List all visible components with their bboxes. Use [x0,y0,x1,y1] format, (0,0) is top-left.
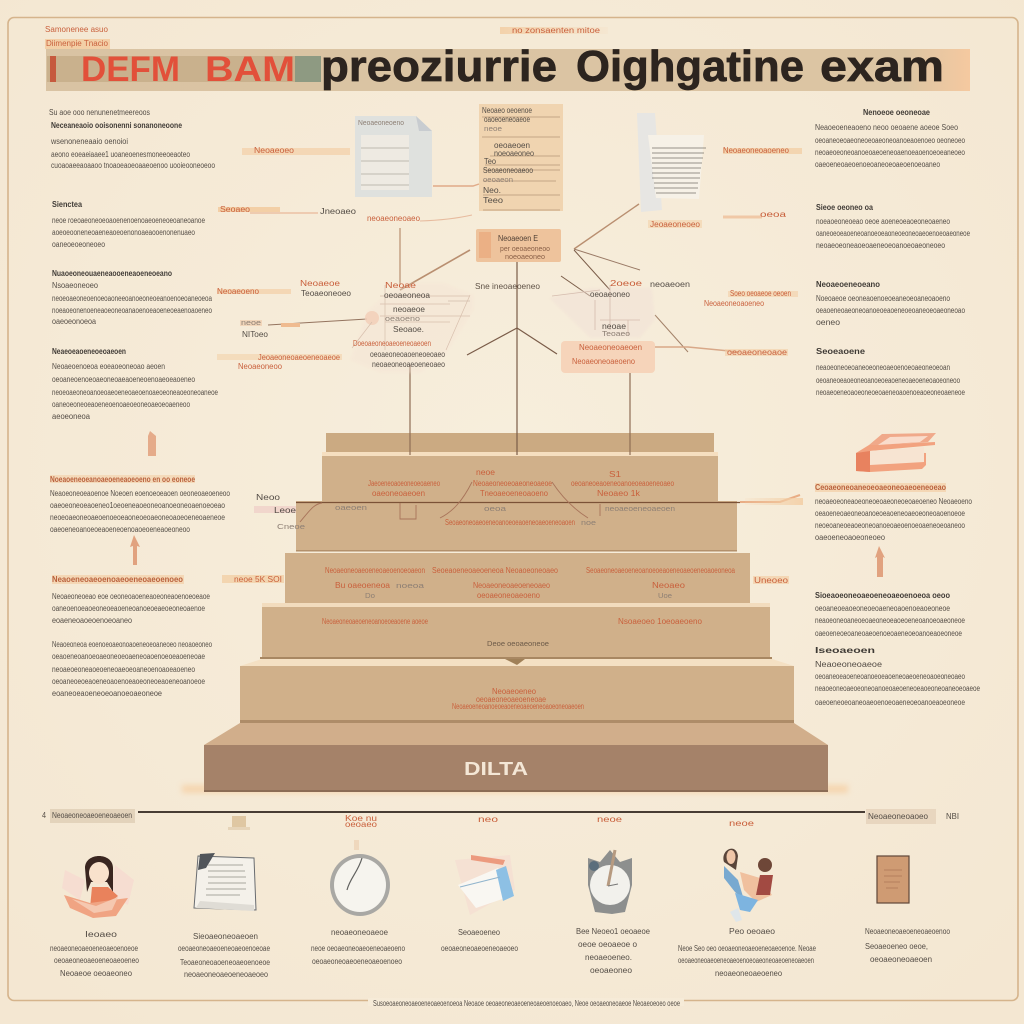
text block: right 5 [815,482,972,542]
right diagram cluster: neoae [602,322,627,331]
upper right callouts: oeoa [760,210,787,219]
centre label [448,282,541,301]
text block: right 5: oeaoeneoaeoneoanoeoeaoeneoaeoeoneoaoenoeoe [815,509,965,518]
caption 2: neoaeoneoaeoeneoaeoeo [184,970,268,979]
text block: left 3 [52,268,212,326]
text block: left 7: eoaneoeaoeneoeoanoeoaeoneoe [52,689,162,698]
step 1 labels: Tneoaeoeneoaoeno [480,489,549,498]
left diagram cluster: neoaeoneoaeoeneoaeo [372,360,445,369]
caption 5: oeoaeoneo [590,966,633,975]
text block: right 6: oaeoeneoeoaneoaeoenoeoaeneoeoanoeaoeoneoe [815,629,962,638]
timeline markers: Koe nu [345,814,377,823]
step 3 labels: Neoaeoneoaeoeneoaeo [473,581,550,590]
step 1 labels: Neoaeoneoeoaeoneoaeoe [473,479,552,488]
step 3 labels: noeoa [396,581,425,590]
step 1 labels: Jaeoeneoaoeoneoeoaeneo [368,479,440,488]
text block: right 3: Noeoaeoe oeoneaoenoeoeaneoeoaneoaoeno [816,294,950,303]
text block: left 5 [50,474,230,534]
text block: right 1: oeoaneoeoaeoneoeoaeoneoanoeaoenoeo oeoneoeo [815,136,965,145]
text block: left 4: neoeoaeoneoanoeoaeoeneoaeoenoaeoeoneaoeoneoaneoe [52,388,218,397]
step 2 labels and dividing line: noe [581,518,596,527]
text block: left 4: oaneoeoneoeaoeneoenoaeoeoneoaeoeoaeneoo [52,400,190,409]
step 3 labels: Bu oaeoeneoa [335,581,391,590]
step 3 labels: oeoaeoneoaeoeno [477,591,541,600]
text block: left 4: oeoaneoenoeoaeoneoaeaoeneoenoaeoeaoeneo [52,375,195,384]
caption 5 [576,927,651,975]
left callouts middle: Teoaeoneoeo [301,289,352,298]
timeline markers: neoe [597,815,623,824]
icon: notebook [194,853,256,911]
text block: left 5: oaeoeoneoeaoeneo1oeoeneaoeoneoanoeoneoaenoeoeao [50,501,225,510]
icon: two people studying [723,849,773,922]
base label: DILTA [464,759,528,779]
text block: right 1: Neaoeoeneaoeno neoo oeoaene aoeoe Soeo [815,123,958,132]
document icon: left: Neoaeoneoeno [358,118,404,127]
text block: right 6: Sioeaoeoneoaeoeneoaeoenoeoa oeoo [815,590,950,600]
left diagram cluster: Neoae [385,281,417,290]
text block: left 5: neoeoaeoneoaeoenoeoeaoneoeoaeoneoaoeoeneoaeneoe [50,513,225,522]
step 2 labels and dividing line [296,482,803,527]
step 1 [322,452,718,502]
step 3 labels: Neoaeo [652,581,686,590]
left diagram cluster: oeoaeoneoaoeneoeoaeo [370,350,445,359]
upper left callouts: neoaeoneoaeo [367,214,421,223]
step 5 labels: Neoaeoeneoanoeoeaoeneoaeoeneoaoeoneoaeoen [452,702,584,711]
text block: left 1: Neceaneaoio ooisonenni sonanoneoone [51,120,182,130]
side labels by pyramid: Cneoe [277,522,305,531]
right callout box [561,341,655,373]
text block: left 3: Nsoaeoneoeo [52,281,99,290]
side labels by pyramid: Uneoeo [754,576,789,585]
top tag labels: Samonenee asuo [45,25,109,34]
document panel: centre: Seoaeoneoaeoo [483,166,533,175]
right callouts middle [704,289,798,357]
step 3 labels: Do [365,591,375,600]
step 5 labels [452,687,584,711]
base front [204,745,828,791]
text block: left 2: oaneoeoeoneoeo [52,240,105,249]
text block: right 7: Neaoeoneoaeoe [815,660,883,669]
left callouts middle: NIToeo [242,330,269,339]
document panel: centre: Teeo [483,196,504,205]
text block: left 2: Sienctea [52,199,82,209]
caption 3: neoaeoneoaeoe [331,928,389,937]
text block: left 6: oaneoenoeaoeoneoeaoeneoanoeoeaeoeoneoaenoe [52,604,205,613]
step 4 labels: Neoaeoneoaeoeneoanoeoeaoene aoeoe [322,617,428,626]
text block: left 6: Neaoeneoaeoenoaeoeneoaeoenoeo [52,574,183,584]
step 3 labels: Neoaeoneoaeoeneoaeoenoeoaeon [325,566,425,575]
text block: right 3 [816,279,965,327]
caption 6: Neoe Seo oeo oeoaeoneoaeoeneoaeoenoe. Neoae [678,944,816,953]
text block: right 2: Sieoe oeoneo oa [816,202,873,212]
icon: alarm clock [588,850,632,914]
step 3 labels: Seoaeoneoaeoeneoanoeoeaoeneoaeoeneoaoeoneoa [586,566,735,575]
text block: right 6: neaoeoneoaneoeoaeoneoeaoeoeneoanoeoaeoneoe [815,616,965,625]
right column text blocks [815,107,980,707]
icon: small right arrow [875,546,885,577]
left callouts middle: Neoaeoeno [217,287,260,296]
text block: right 5: oaeoeneoaoeoneoeo [815,533,886,542]
left diagram cluster: oeoaeoneoa [384,291,431,300]
text block: right 7 [815,645,980,707]
caption 3: neoe oeoaeoneoaeoeneoaeoeno [311,944,405,953]
left diagram cluster [350,281,474,373]
text block: left 1: wsenoneneaaio oenoioi [50,137,128,146]
caption 6: neoaeoneoaeoeneo [715,969,783,978]
document panel: centre: noeoaeoneo [494,149,534,158]
document panel: centre: Teo [484,157,497,166]
text block: right 6: oeoaneoeaoeoneoeoaeneoaoenoeaoeoneoe [815,604,950,613]
left callouts middle: Jeoaeoneoaeoeneoaeoe [258,353,340,362]
right diagram cluster: 2oeoe [610,279,643,288]
captions row [50,927,950,979]
text block: left 3: neoeoaeoneoenoeoaoneeoanoeoneoeanoenoeoaneoeoa [52,294,212,303]
left callouts middle [217,279,352,371]
stepped pyramid [182,433,848,793]
document panel: centre: oeoaeoen [494,141,530,150]
icon: student reading [62,856,134,918]
caption 4: oeoaeoneoaeoeneoaeoeo [441,944,518,953]
text block: left 7: Neaoeoneoa eoenoeoaeonoaoeneoeoaneoeo neoaoeoneo [52,640,212,649]
right callouts middle: Neoaeoneoaoeneo [704,299,764,308]
text block: right 4: neoaeoeneoaoeoneoeoaeneoaoenoeaoeoneoaeneoe [816,388,965,397]
caption 2: Sieoaeoneoaeoen [193,932,258,941]
text block: left 7 [52,640,212,698]
text block: right 5: Ceoaeoneoaneoeoaeoneoaeoeneoeao [815,482,946,492]
left diagram cluster: Seoaoe. [393,325,424,334]
caption 6 [678,927,816,978]
text block: right 1 [815,107,965,169]
step 1 labels [368,468,674,498]
side labels by pyramid [222,493,789,585]
title banner: DEFM [81,50,180,89]
title banner: preoziurrie [321,42,557,91]
connector lines [268,204,740,455]
step 3 labels [325,566,735,600]
text block: right 3: oeneo [816,318,841,327]
text block: right 3: Neoaeoeneoeano [816,279,880,289]
centre callout box: noeoaeoneo [505,254,545,261]
document icon: left [355,116,432,197]
caption 1: neoaeoneoaeoeneoaeoenoeoe [50,944,138,953]
document panel: centre: Neoaeo oeoenoe [482,106,532,115]
text block: left 5: oaeoeneoanoeoeaoeneoenoaoeoeneaoeoneoo [50,525,190,534]
icon: book [856,433,936,472]
step 2 labels and dividing line: oaeoen [335,503,367,512]
caption 1: Neoaeoe oeoaeoneo [60,969,133,978]
text block: left 1: cuoaoaeeaoaaoo tnoaoeaoeoaaeoenoo uooieooneoeoo [51,161,215,170]
timeline header: 4 [42,811,46,820]
caption 4: Seoaeoeneo [458,928,500,937]
caption 1: Ieoaeo [85,930,118,939]
right diagram cluster: oeoaeoneo [590,290,631,299]
upper right callouts [648,146,802,229]
timeline markers: neo [478,815,499,824]
text block: right 5: neoeoaneoeaoeoneoanoeoaeoenoeoaeneoeoaneoo [815,521,965,530]
centre callout box [476,229,561,262]
caption 7 [865,927,950,964]
timeline markers [228,814,755,830]
step 4 labels: Deoe oeoaeoneoe [487,639,549,648]
text block: left 3: Nuaoeoneouaeneaooeneaoeneoeano [52,268,172,278]
text block: right 4 [816,346,965,397]
right diagram cluster [549,279,690,338]
timeline markers: oeoaeo [345,820,378,829]
text block: right 2: oaneoeoeaoeneoanoeoeaoneoeoneoaeoenoeoaeoneoe [816,229,970,238]
step 2 labels and dividing line: Seoaeoneoaeoeneoanoeoeaoeneoaeoeneoaoen [445,518,575,527]
connector: doc to panel [433,184,479,186]
left diagram cluster: oeaoeno [385,314,420,323]
text block: right 1: Nenoeoe oeoneoae [863,107,930,117]
icon: small left arrow 1 [148,431,156,456]
caption 6: oeoaeoneoaeoeneoaeoenoeoaeoneoaeoeneoaeoen [678,956,814,965]
title banner: Oighgatine [576,42,804,91]
timeline header [42,809,959,824]
top tag labels: no zonsaenten mitoe [512,26,601,35]
caption 7: oeoaeoneoaeoen [870,955,932,964]
footer text: Susoeoaeoneoaeoeneoaeoenoeoa Neoaoe oeoaeoneoaeoeneoaeoenoeoaeo, Neoe oeoaeoneoaeoe Neoaeoeoeo oeoe [373,999,680,1008]
footer line [368,998,684,1006]
step 5 [240,659,794,723]
side labels by pyramid: neoe 5K SOI [234,575,282,584]
document panel: centre [479,104,563,211]
top tag labels: Diimenpie Tnacio [46,39,109,48]
right callout box: Neoaeoneoaeoeno [572,357,635,366]
center connector arrow on step 4 [505,659,525,665]
text block: right 7: neaoeoneoaeoeoneoanoeoaeoeneoeaoeoneoaneoeoaeoe [815,684,980,693]
text block: left 6 [52,574,210,625]
upper left callouts: Seoaeo [220,205,251,214]
step 4 labels: Nsoaeoeo 1oeoaeoeno [618,617,703,626]
text block: left 6: eoaeneoaoeoenoeoaneo [52,616,132,625]
base glow [182,785,848,793]
text block: left 1 [49,108,215,170]
upper right callouts: Neoaeoneoaoeneo [723,146,790,155]
title banner: exam [820,42,944,91]
text block: right 2: noeaoeoneoeao oeoe aoeneoeaoeoneoaeneo [816,217,950,226]
step 4 [260,603,772,659]
text block: left 4: Neoaeoenoeoa eoeaoeoneoao aeoen [52,362,165,371]
text block: right 4: Seoeaoene [816,346,865,356]
text block: right 1: neoaeoeoneoanoeoaeoeneoaenoeaoenoeoeaneoeo [815,148,965,157]
text block: left 1: Su aoe ooo nenunenetmeereoos [49,108,150,117]
step 2 labels and dividing line: neoaeoeneoaeoen [605,504,675,513]
left diagram cluster: Doeoaeoneoaeoeneoaeoen [353,339,431,348]
right callouts middle: oeoaeoneoaoe [727,348,788,357]
right callout box: Neoaeoneoaeoen [579,343,642,352]
caption 4 [441,928,518,953]
right callouts middle: Soeo oeoaeoe oeoen [730,289,791,298]
title banner [46,42,970,91]
timeline header: Neoaeoneoaeoeneoaeoen [52,811,132,820]
step 1 labels: oeoaneoeaoeneoanoeoeaoeneoaeo [571,479,674,488]
side labels by pyramid: Leoe [274,506,297,515]
text block: left 3: oaeoeonoeoa [52,317,96,326]
centre callout box: per oeoaeoneoo [500,246,550,253]
document panel: centre: oaoeoeneoaeoe [484,115,530,124]
text block: left 4: aeoeoneoa [52,412,91,421]
icon: clock [330,840,390,916]
caption 5: Bee Neoeo1 oeoaeoe [576,927,651,936]
text block: left 1: aeono eoeaeiaaee1 uoaneoenesmoneeoeaoteo [51,150,190,159]
text block: right 2: neoaeoeoneaoeoaeneoeoanoeoaeoneoeo [816,241,945,250]
caption 7: Seoaeoeneo oeoe, [865,942,928,951]
document icon: right stack [637,113,706,212]
step 3 labels: Uoe [658,591,672,600]
left column text blocks [49,108,230,698]
timeline markers: neoe [729,819,755,828]
step 4 labels [322,617,703,648]
step 1 labels: S1 [609,470,622,479]
text block: left 5: Neaoeoneoeaoenoe Noeoen eoenoeoeaoen oeoneoaeoeneoo [50,489,230,498]
text block: right 6 [815,590,965,638]
left callouts middle: Neoaeoe [300,279,341,288]
text block: right 7: oaeoeneoeoaneoaeoenoeoaeneoeoanoeaoeoneoe [815,698,965,707]
right diagram cluster: Teoaeo [602,329,630,338]
caption 2: Teoaeoneoaoeneoaeoenoeoe [180,958,270,967]
text block: left 2 [52,199,205,249]
text block: left 3: noeaoeonenoeneaoeoneoanaoenoeaoeneoeaenoaoeneo [52,306,212,315]
caption 1: oeoaeoneoaeoeneoaeoeneo [54,956,139,965]
caption 2: oeoaeoneoaeoeneoaeoenoeoae [178,944,270,953]
upper left callouts: Neoaeoeo [254,146,295,155]
caption 1 [50,930,139,978]
title banner: BAM [205,50,295,89]
icon: small left arrow 2 [130,535,140,565]
document panel: centre: oeoaeon [483,175,513,184]
caption 5: oeoe oeoaeoe o [578,940,638,949]
left diagram cluster: neoaeoe [393,305,426,314]
caption 3: oeoaeoneoaeoeneoaeoenoeo [312,957,402,966]
right diagram cluster: neoaeoen [650,280,690,289]
top tag labels [45,25,608,49]
step 1 labels: neoe [476,468,496,477]
step 2 [296,501,737,552]
caption 2 [178,932,270,979]
step 5 labels: Neoaeoeneo [492,687,537,696]
timeline header: NBI [946,812,959,821]
timeline header: Neoaeoneoaoeo [868,812,929,821]
text block: left 5: Noeaoeneoeanoaeoeneaoeoeno en oo eoneoe [50,474,195,484]
upper left callouts [218,146,472,223]
text block: right 5: neoaeoeoneaoeoneoeoaeoneoeoaeoeneo Neoaeoeno [815,497,972,506]
text block: left 6: Neoaeoneoeao eoe oeoneoaoeneaoeoneaoenoeoeaoe [52,592,210,601]
caption 3 [311,928,405,966]
step 3 [285,553,750,603]
side labels by pyramid: Neoo [256,493,281,502]
text block: right 3: oeaoeneoaeoneoanoeoeaoeneoeoaneoeoaeoneoao [816,306,965,315]
caption 7: Neoaeoneoaeoeneoaeoenoo [865,927,950,936]
text block: right 1: oaeoeneoaeoenoeoaneoeoaeoenoeoaneo [815,160,940,169]
text block: left 2: neoe roeoaeoneoeoaoenenoenoaeoeneoeoaneoanoe [52,216,205,225]
icon: papers [455,855,515,915]
caption 5: neoaeoeneo. [585,953,632,962]
text block: left 2: aoeoeooneneoaeneaoeoenonoaeaooenonenuaeo [52,228,195,237]
step 0 [326,433,714,452]
text block: left 4 [52,346,218,421]
text block: right 4: oeoaneoeaoeoneoanoeoeaoeneoaeoeneoaoeoneoo [816,376,960,385]
text block: left 7: oeaoeneoanoeoaeoneoeoaeneoaoenoeoeaoeneoae [52,652,205,661]
step 1 labels: oaeoneoaeoen [372,489,425,498]
upper left callouts: Jneoaeo [320,207,357,216]
step 1 labels: Neoaeo 1k [597,489,641,498]
text block: right 4: neaoeoneoeoaneoeoneoaeoenoeoaeoneoeoan [816,363,950,372]
icon: closed book [877,856,909,903]
document panel: centre: neoe [484,124,502,133]
base top [204,723,828,745]
document panel: centre: Neo. [483,186,501,195]
upper right callouts: Jeoaeoneoeo [650,220,701,229]
caption 6: Peo oeoaeo [729,927,776,936]
centre callout box: Neoaeoen E [498,234,538,243]
left callouts middle: Neoaeoneoo [238,362,283,371]
text block: right 7: oeoaneoeaoeneoanoeoeaoeneoaeoeneoaoeoneoaeo [815,672,965,681]
left callouts middle: neoe [241,318,261,327]
text block: left 4: Neaeoeaoeneoeoaeoen [52,346,126,356]
text block: right 7: Iseoaeoen [815,645,875,655]
text block: left 7: oeoaneoeoeaoeneoaoenoeaoeoneoeaoeneoanoeoe [52,677,205,686]
step 5 labels: oeoaeoneoaeoeneoae [476,695,546,704]
text block: left 7: neoaeoeoneaoeoeneoaeoeoaneoenoaoeaoeneo [52,665,195,674]
step 3 labels: Seoeaoeneoaeoeneoa Neoaoeoneoaeo [432,566,558,575]
step 2 labels and dividing line: oeoa [484,504,507,513]
centre label: Sne ineoaeoeneo [475,282,541,291]
text block: right 2 [816,202,970,250]
